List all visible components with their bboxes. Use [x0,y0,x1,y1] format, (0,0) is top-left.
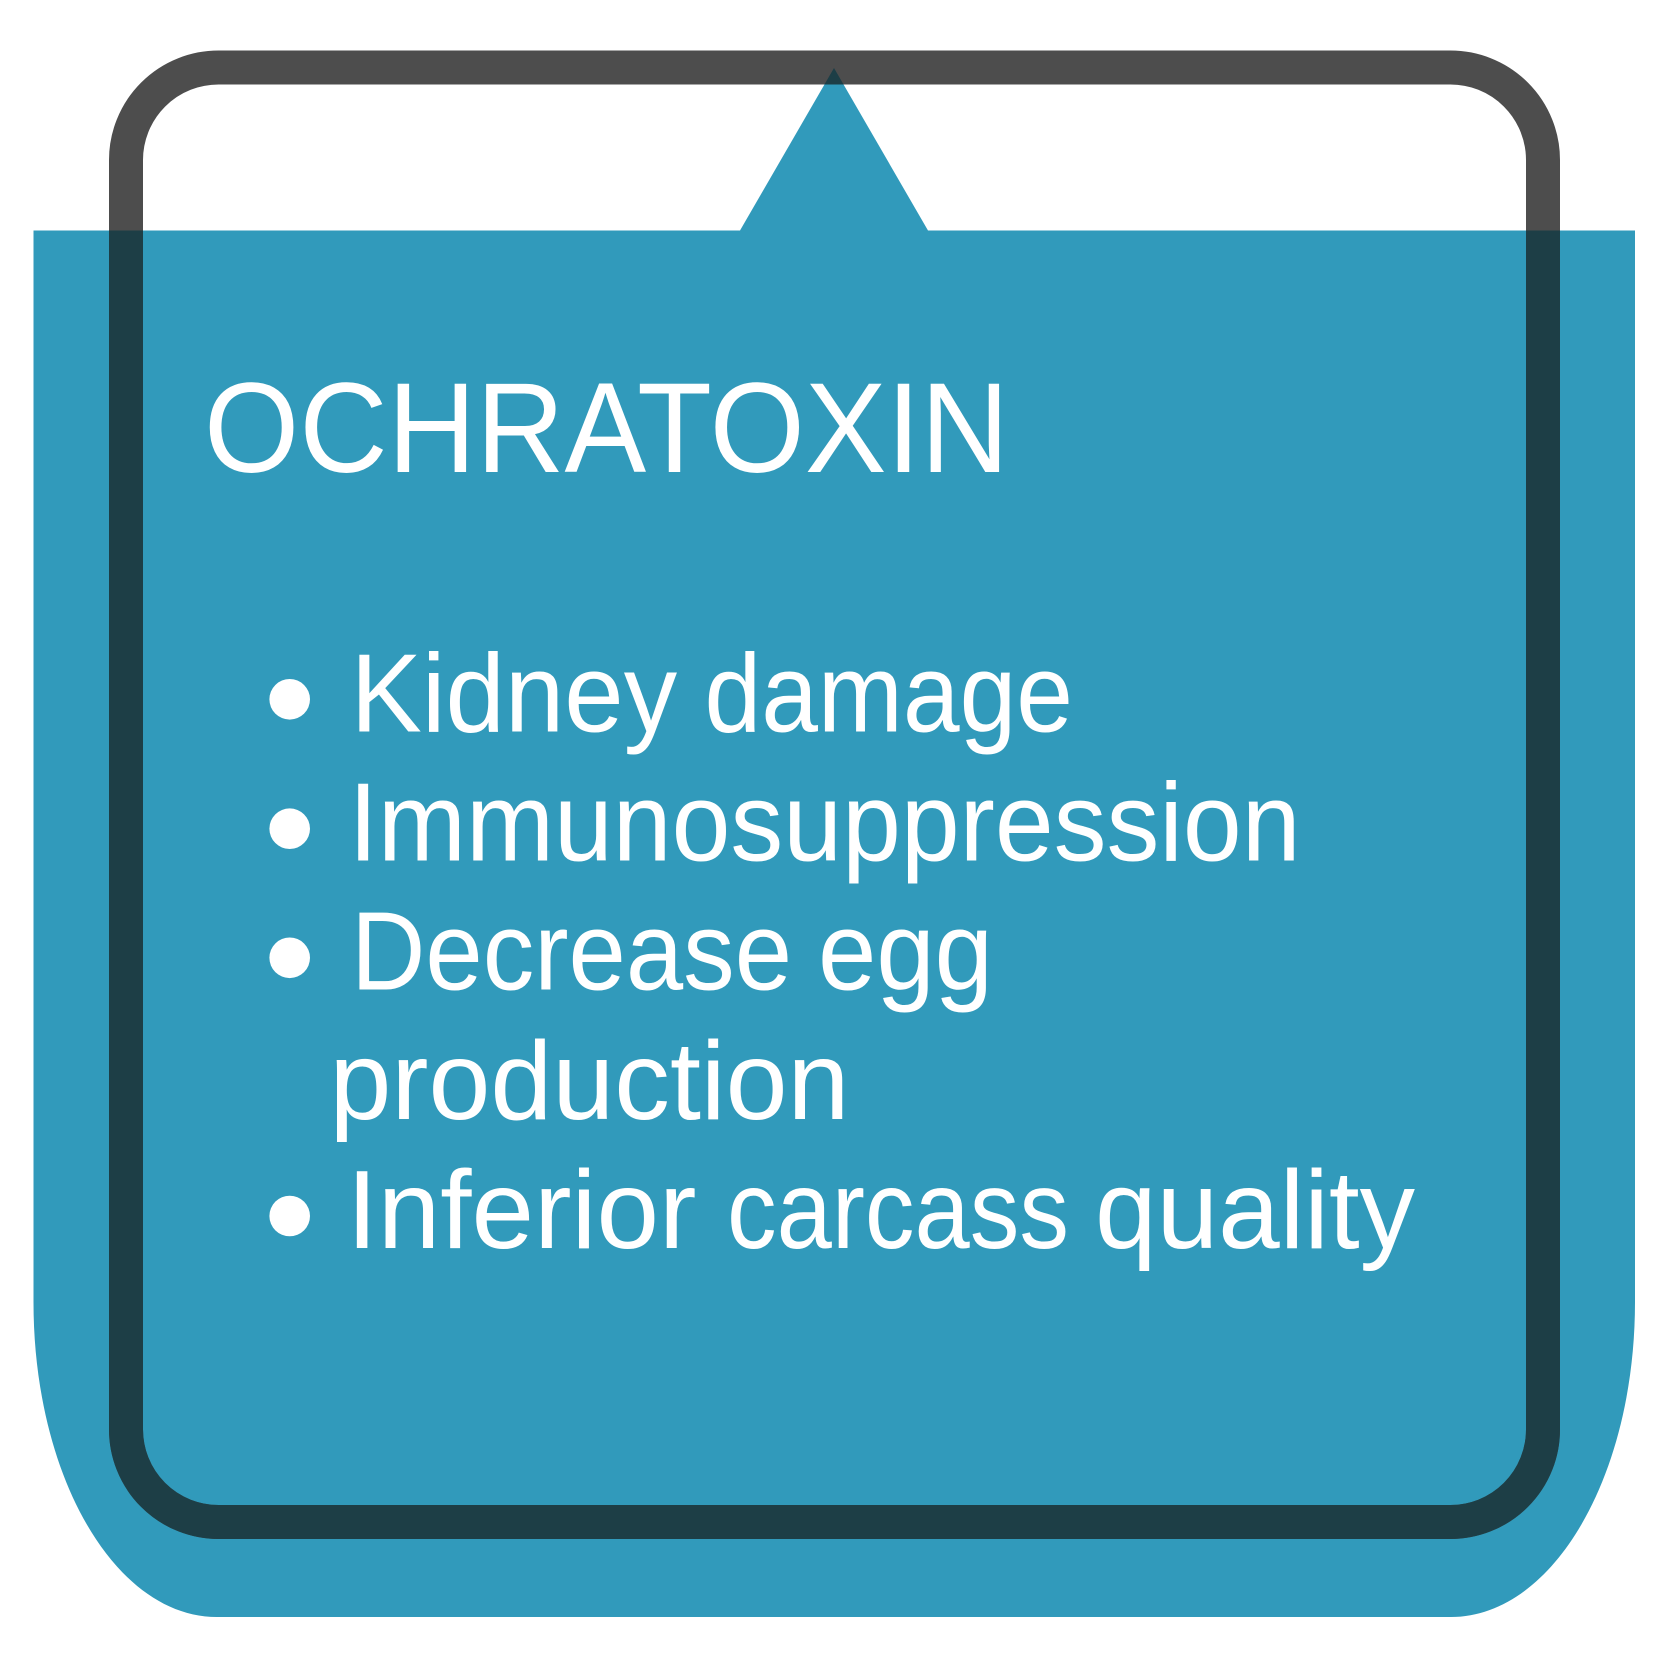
bullet: kidney damage: Kidney [351,632,678,756]
bullet: decrease egg production: egg [818,890,993,1014]
bullet: inferior carcass quality: carcass [727,1148,1069,1272]
bullet: inferior carcass quality [269,1148,1415,1272]
bullet: immunosuppression: Immunosuppression [348,761,1300,885]
bullet list [269,632,1415,1272]
bullet: kidney damage: damage [704,632,1073,756]
title: OCHRATOXIN [204,357,1009,500]
rounded frame outline [126,68,1543,1522]
bullet: kidney damage [269,632,1073,756]
bullet: decrease egg production: production [330,1019,850,1143]
bullet: inferior carcass quality: Inferior [346,1148,696,1272]
bullet: decrease egg production [269,890,993,1143]
bullet: decrease egg production: Decrease [351,890,792,1014]
bullet: inferior carcass quality: quality [1095,1148,1415,1272]
